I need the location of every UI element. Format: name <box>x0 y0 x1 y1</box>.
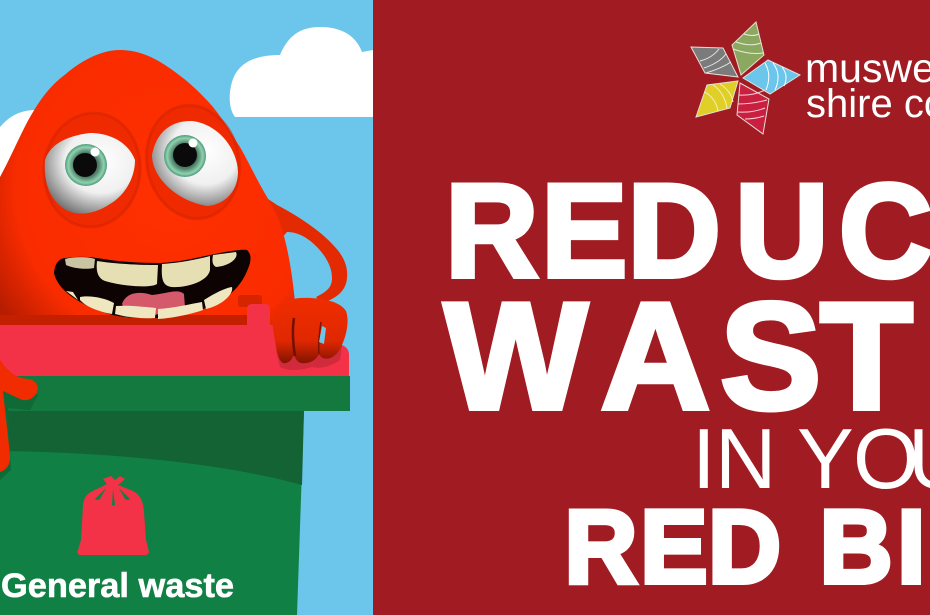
upper teeth <box>65 257 95 269</box>
shadow of lid tab <box>238 295 262 307</box>
lower teeth <box>66 287 232 319</box>
shaded body base <box>0 315 247 325</box>
mouth <box>54 250 251 319</box>
finger shadow <box>276 345 342 370</box>
arm <box>0 360 38 472</box>
tongue <box>122 291 185 316</box>
petal: red <box>737 83 769 134</box>
icon: five-petal star <box>691 22 800 134</box>
gap between fingers <box>319 326 326 344</box>
left eye socket <box>38 108 146 232</box>
bin rim <box>0 376 350 411</box>
panel: red background <box>373 0 930 615</box>
hand and fingers <box>272 298 348 363</box>
finger crease two <box>319 322 321 354</box>
bag creases <box>95 488 130 506</box>
monster body <box>0 50 297 325</box>
illustration: green wheelie bin <box>0 304 350 615</box>
finger crease one <box>293 318 295 356</box>
right eye <box>152 121 238 206</box>
bin shadow band <box>0 410 304 485</box>
monster arm <box>262 195 347 303</box>
bin lid <box>0 304 349 376</box>
arm shadow <box>0 365 38 480</box>
icon: large cloud <box>230 27 373 117</box>
bin body <box>0 410 304 615</box>
illustration: monster right hand <box>272 298 348 370</box>
petal: blue <box>743 60 800 94</box>
logo: Muswellbrook Shire Council <box>691 22 930 134</box>
petal: yellow <box>696 81 738 117</box>
illustration: monster left arm <box>0 360 38 480</box>
petal: green <box>732 22 764 75</box>
icon: small cloud behind monster <box>0 110 36 180</box>
illustration: red monster <box>0 50 347 325</box>
icon: rubbish bag <box>77 476 149 555</box>
petal: grey <box>691 47 738 77</box>
panel: sky background <box>0 0 373 615</box>
left eye <box>45 133 135 214</box>
right eye socket <box>136 97 250 227</box>
label: General waste: General waste <box>1 567 234 605</box>
